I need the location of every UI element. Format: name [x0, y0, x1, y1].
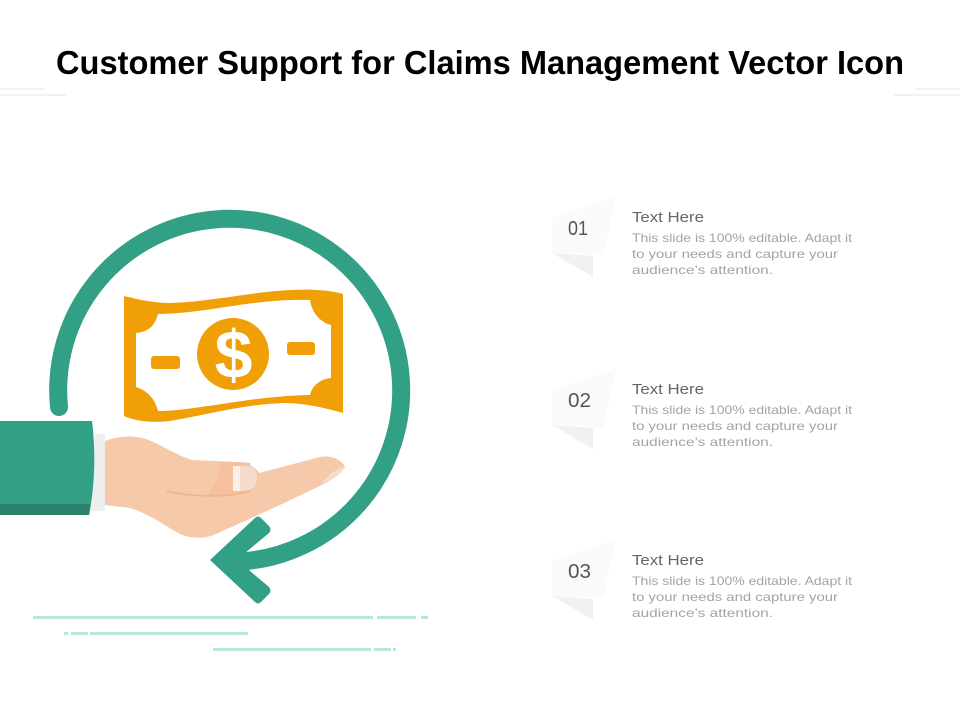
text 02: audience’s attention.	[632, 435, 773, 449]
text 01: audience’s attention.	[632, 263, 773, 277]
badge 02: 02	[568, 390, 591, 412]
palm crease	[166, 491, 250, 496]
item 02	[552, 369, 853, 449]
right dash	[287, 342, 315, 355]
left dash	[151, 356, 180, 369]
text 03: to your needs and capture your	[632, 590, 838, 604]
badge 02	[552, 369, 616, 449]
badge 03: 03	[568, 561, 591, 583]
coin	[197, 317, 269, 393]
sleeve	[0, 421, 94, 515]
badge 01: 01	[568, 218, 588, 240]
fingernail	[321, 467, 345, 484]
badge 03	[552, 540, 616, 620]
text 02: This slide is 100% editable. Adapt it	[632, 403, 853, 417]
text 02: to your needs and capture your	[632, 419, 838, 433]
sleeve band	[0, 504, 90, 515]
text 03: audience’s attention.	[632, 606, 773, 620]
title: Customer Support for Claims Management Vector Icon	[56, 44, 904, 81]
coin: $	[215, 317, 252, 393]
icon: hand with sleeve	[0, 421, 345, 538]
badge 01	[552, 197, 616, 277]
text 01	[632, 209, 853, 277]
item 03	[552, 540, 853, 620]
text 03	[632, 552, 853, 620]
thumb shade	[207, 462, 250, 496]
item 01	[552, 197, 853, 277]
text 01: to your needs and capture your	[632, 247, 838, 261]
cuff	[90, 434, 105, 511]
icon: dollar banknote	[124, 290, 343, 422]
hand	[105, 437, 345, 538]
text 02: Text Here	[632, 381, 704, 398]
thumbnail	[233, 466, 257, 491]
text 01: Text Here	[632, 209, 704, 226]
text 03: This slide is 100% editable. Adapt it	[632, 574, 853, 588]
text 01: This slide is 100% editable. Adapt it	[632, 231, 853, 245]
icon: circular arrow	[58, 219, 401, 604]
decorative ground lines	[33, 616, 428, 651]
text 02	[632, 381, 853, 449]
text 03: Text Here	[632, 552, 704, 569]
